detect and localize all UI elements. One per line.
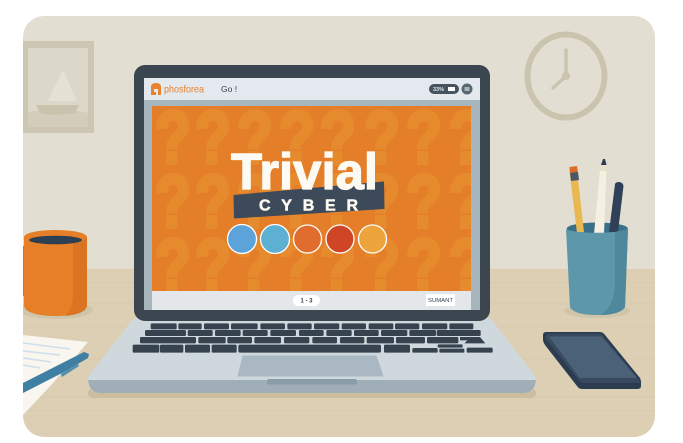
icon: yellow pencil [570, 166, 584, 233]
icon: orange coffee mug [19, 230, 93, 319]
pagination pill [293, 295, 320, 306]
question mark pattern: ? [279, 225, 315, 308]
question mark pattern: ? [237, 97, 273, 180]
question mark pattern: ? [320, 225, 356, 308]
question mark pattern: ? [237, 161, 273, 244]
laptop [88, 65, 536, 393]
title: Trivial [231, 143, 378, 200]
question mark pattern: ? [364, 97, 400, 180]
icon: white pencil [594, 159, 606, 234]
brand name: phosforea [164, 84, 204, 96]
banner [234, 182, 384, 218]
screen bezel [134, 65, 490, 321]
icon: menu button [462, 84, 472, 94]
question mark pattern: ? [279, 97, 315, 180]
question mark pattern: ? [279, 161, 315, 244]
icon: pen holder cup [564, 159, 630, 318]
question mark pattern: ? [195, 161, 231, 244]
icon: wall clock [528, 34, 604, 118]
question mark pattern: ? [155, 97, 191, 180]
question mark pattern: ? [406, 225, 442, 308]
touchpad [238, 356, 383, 376]
pagination pill: 1 - 3 [300, 298, 313, 304]
icon: blue pen [23, 352, 89, 393]
question mark pattern: ? [320, 97, 356, 180]
laptop base [88, 318, 536, 393]
question mark pattern: ? [364, 225, 400, 308]
answer circles [228, 224, 386, 254]
submit button: SUMANT [428, 298, 454, 304]
bottom bar [152, 291, 471, 310]
question mark pattern: ? [449, 97, 485, 180]
question mark pattern: ? [195, 97, 231, 180]
laptop shadow [88, 388, 536, 398]
icon: smartphone [543, 332, 641, 389]
screen area [144, 78, 485, 310]
icon: phosforea logo [151, 83, 161, 95]
game slide [152, 106, 471, 291]
keyboard [133, 323, 493, 353]
app header bar [144, 78, 480, 100]
question mark pattern: ? [406, 161, 442, 244]
icon: framed sailboat picture [23, 41, 94, 133]
question mark pattern: ? [155, 225, 191, 308]
question mark pattern: ? [449, 161, 485, 244]
question mark pattern [156, 109, 471, 291]
icon: navy pen [609, 182, 624, 232]
progress pill: 33% [433, 87, 444, 93]
question mark pattern: ? [406, 97, 442, 180]
submit button [426, 294, 455, 306]
subtitle: CYBER [259, 198, 358, 214]
menu label: Go ! [221, 84, 237, 94]
progress pill [429, 84, 459, 94]
question mark pattern: ? [320, 161, 356, 244]
icon: paper notes [23, 335, 88, 415]
question mark pattern: ? [449, 225, 485, 308]
question mark pattern: ? [195, 225, 231, 308]
question mark pattern: ? [237, 225, 273, 308]
question mark pattern: ? [364, 161, 400, 244]
question mark pattern: ? [155, 161, 191, 244]
